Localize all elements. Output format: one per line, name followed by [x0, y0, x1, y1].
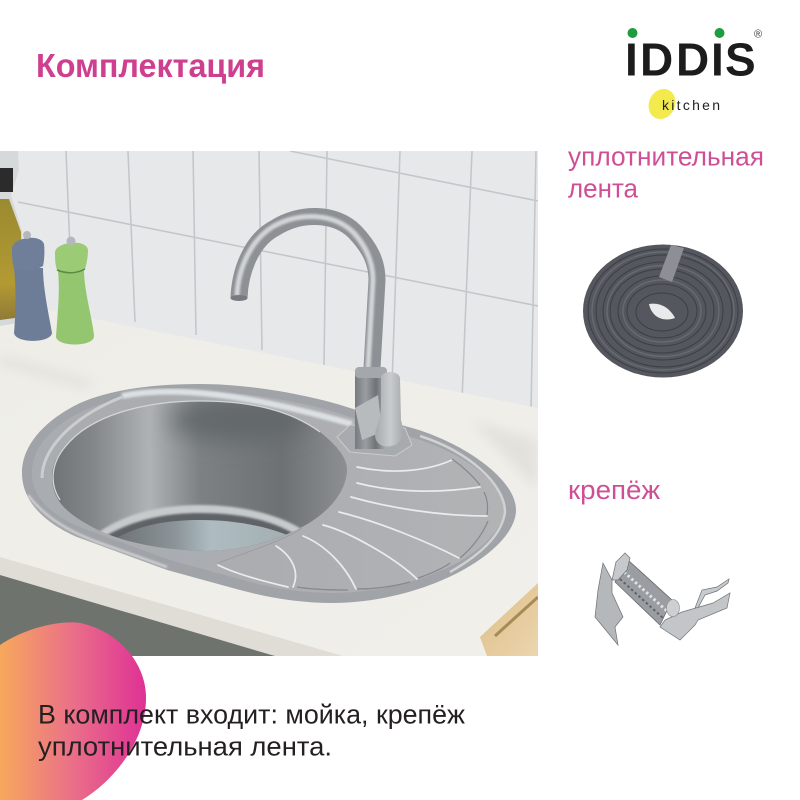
clip lower arm — [660, 593, 730, 640]
faucet knob — [355, 395, 382, 440]
sink inner deck — [32, 392, 504, 593]
bowl shading — [100, 402, 306, 551]
cabinet below counter — [0, 575, 275, 656]
logo subtitle: kitchen — [662, 97, 720, 113]
description text: В комплект входит: мойка, крепёж — [38, 700, 465, 730]
bottle oil — [0, 199, 22, 320]
icon: yellow kitchen spot — [644, 84, 680, 124]
drainer grooves — [218, 460, 487, 589]
sink — [22, 384, 516, 603]
lower rim highlight — [28, 495, 167, 567]
left rim highlight — [42, 397, 122, 478]
image: tape roll — [583, 244, 743, 378]
faucet body — [355, 373, 385, 449]
counter shadow right — [486, 428, 536, 478]
faucet plate — [337, 425, 412, 456]
bottle glass — [0, 151, 24, 326]
rim highlight right — [420, 436, 505, 572]
logo: IDDIS kitchen — [625, 28, 762, 124]
faucet neck highlight — [237, 216, 373, 368]
board groove — [495, 597, 538, 636]
image: mounting clip — [595, 553, 730, 645]
sink deck — [22, 384, 516, 603]
icon: green dot right — [714, 28, 724, 38]
tape centre hole — [649, 304, 675, 319]
photo: sink with faucet — [0, 151, 538, 656]
label: sealing tape — [568, 142, 764, 204]
clip screw head — [666, 600, 680, 616]
description text — [38, 700, 465, 762]
drainer outer grooves — [297, 459, 488, 590]
counter shadow line — [0, 360, 90, 385]
icon: green dot left — [628, 28, 638, 38]
tiled wall — [0, 151, 538, 421]
faucet spout tip — [230, 295, 248, 301]
countertop — [0, 358, 538, 656]
bowl floor shadow — [107, 512, 292, 551]
tape tab — [659, 245, 684, 282]
oil bottle — [0, 151, 24, 326]
panel: sealing tape — [568, 142, 764, 378]
wooden board — [480, 583, 538, 656]
bowl floor ring — [100, 504, 301, 538]
counter front edge — [0, 557, 343, 656]
label: fasteners: крепёж — [568, 475, 660, 505]
top rim bright band — [122, 392, 352, 424]
clip bracket left — [595, 563, 623, 645]
registered mark: ® — [754, 28, 762, 40]
mill: blue — [12, 231, 52, 341]
mill: green — [55, 236, 94, 344]
clip spring tab — [695, 579, 729, 608]
bottle cap — [0, 168, 13, 192]
faucet — [230, 216, 412, 456]
faucet handle — [375, 372, 403, 447]
logo wordmark: IDDIS — [625, 34, 756, 86]
faucet neck — [239, 216, 377, 368]
bowl rim line — [53, 401, 320, 500]
drainer panel edge — [218, 528, 302, 563]
clip toothed bar — [615, 560, 672, 625]
label: sealing tape: лента — [568, 174, 639, 204]
faucet collar — [355, 367, 387, 378]
title: Комплектация — [36, 47, 265, 84]
bowl floor — [118, 520, 286, 551]
description text: уплотнительная лента. — [38, 732, 332, 762]
decorative gradient blob — [0, 622, 146, 800]
label: sealing tape: уплотнительная — [568, 142, 764, 172]
clip top hook — [612, 553, 630, 580]
bowl — [52, 402, 347, 534]
panel: fasteners — [568, 475, 730, 645]
